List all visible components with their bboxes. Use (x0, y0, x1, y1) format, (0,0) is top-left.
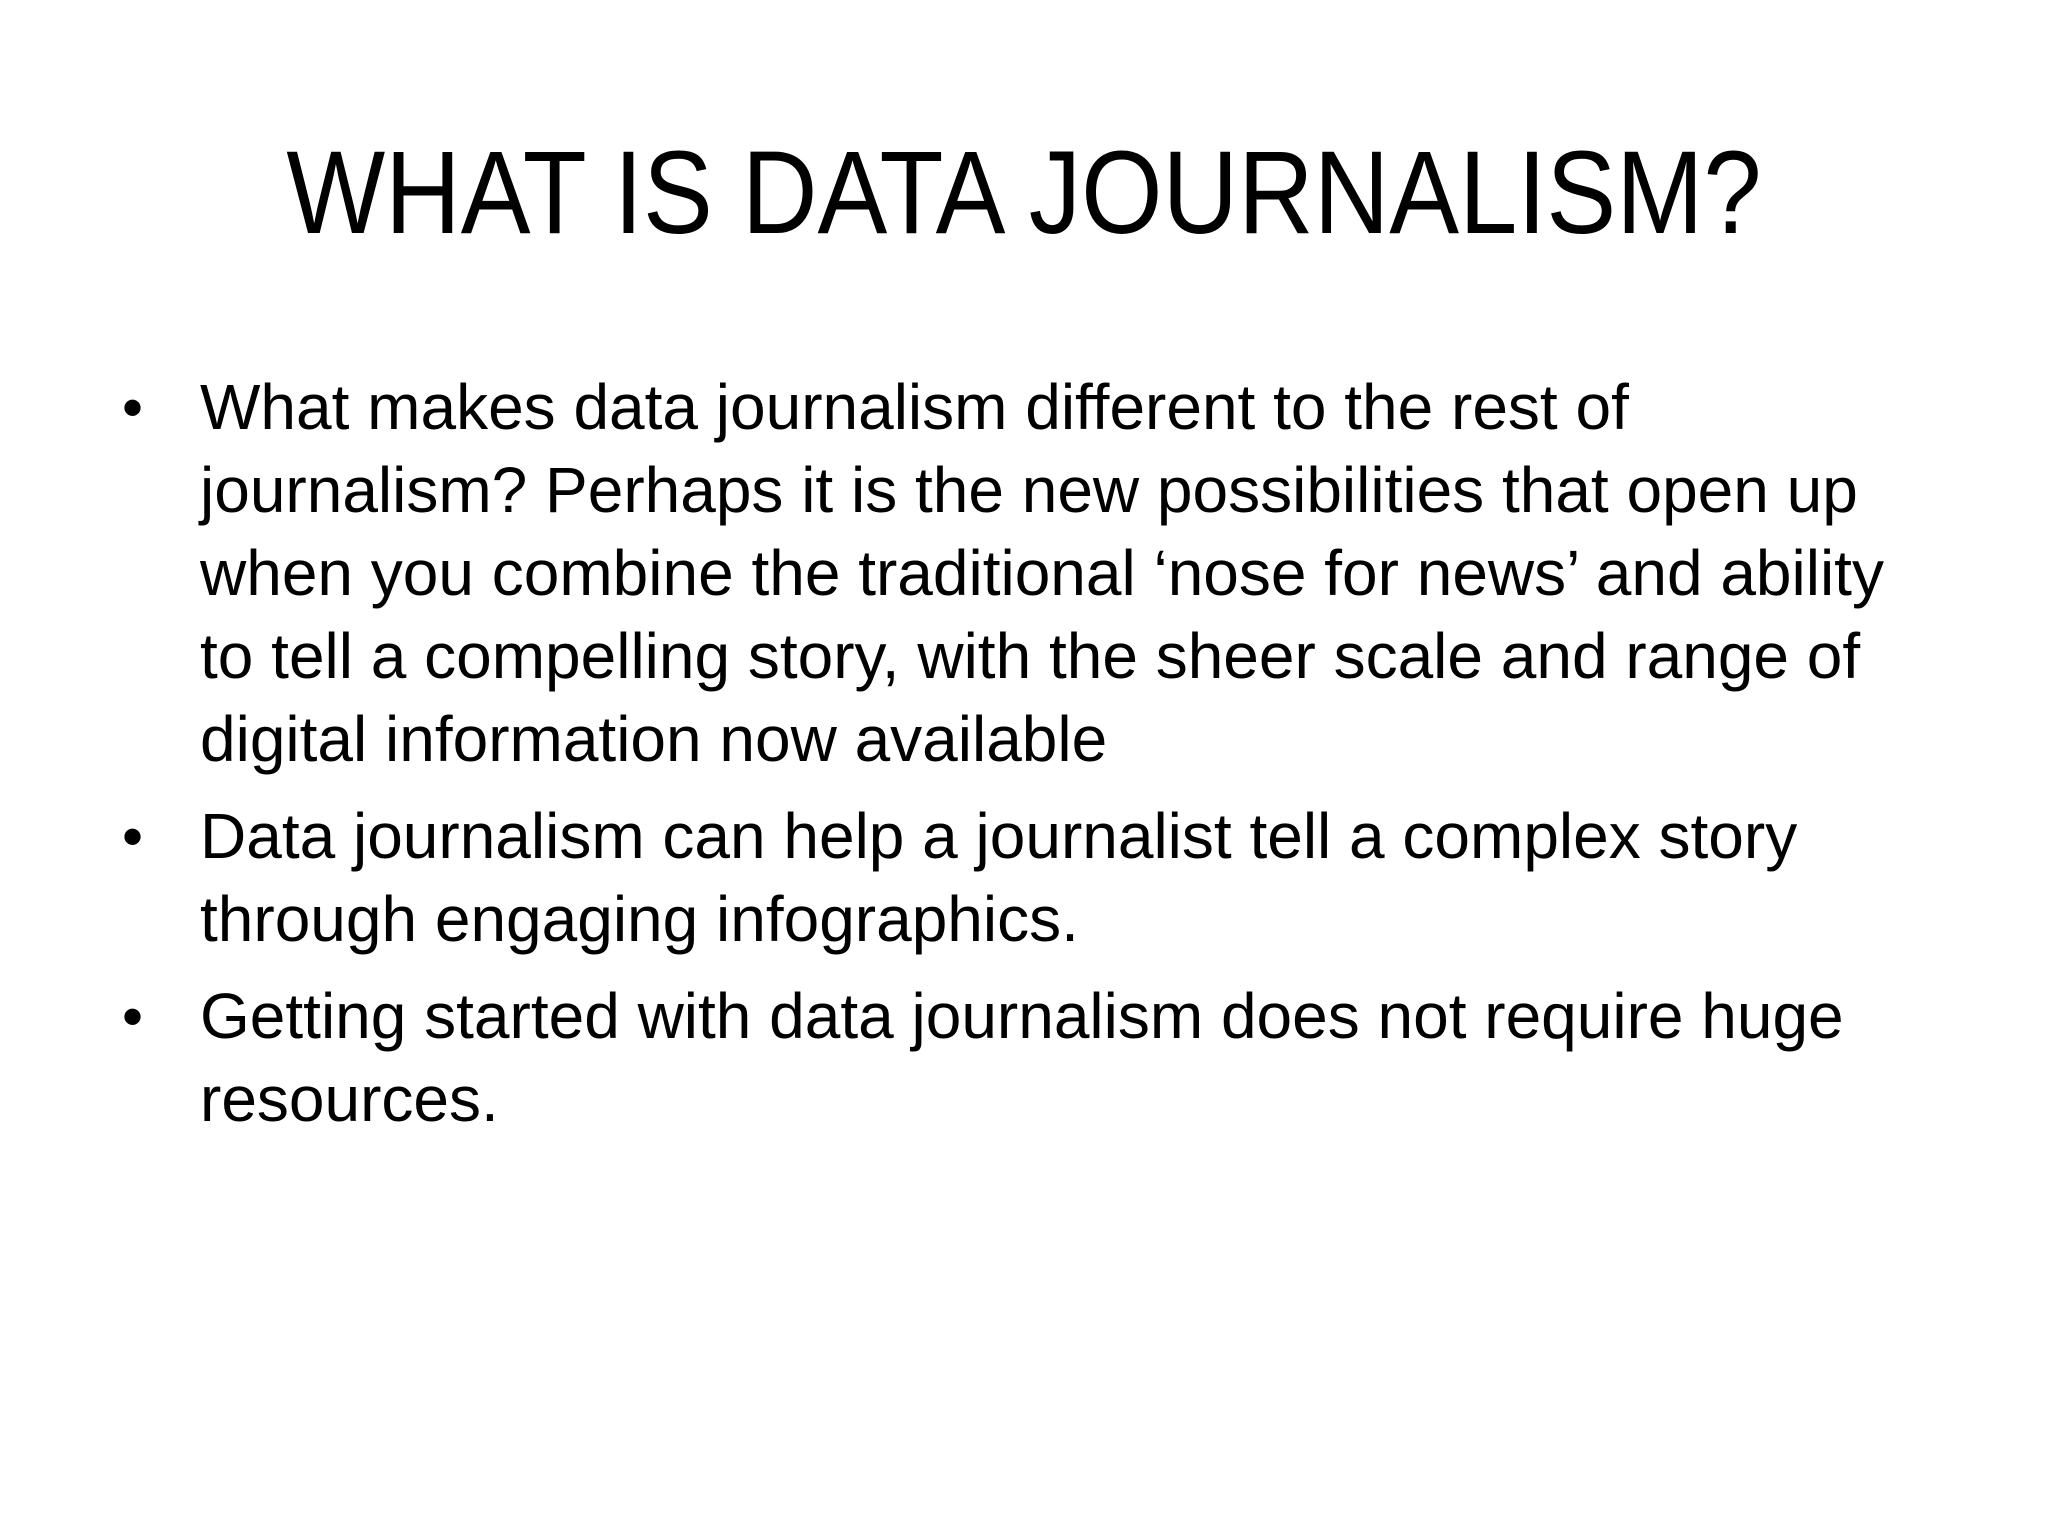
bullet 3 (122, 980, 1844, 1135)
bullet 3: resources. (200, 1063, 499, 1135)
bullet 2: Data journalism can help a journalist tell a complex story (200, 800, 1797, 872)
bullet 2: • (122, 803, 143, 870)
title: WHAT IS DATA JOURNALISM? (286, 127, 1762, 259)
bullet 2: through engaging infographics. (200, 883, 1079, 955)
bullet 3: Getting started with data journalism does not require huge (200, 980, 1844, 1052)
bullet 1: What makes data journalism different to the rest of (200, 371, 1629, 443)
bullet 1: when you combine the traditional ‘nose for news’ and ability (200, 537, 1884, 609)
bullet 1: to tell a compelling story, with the sheer scale and range of (200, 620, 1860, 692)
bullet 2 (122, 800, 1798, 955)
bullet 1: • (122, 374, 143, 441)
bullet 1: digital information now available (200, 703, 1107, 775)
bullet 3: • (122, 983, 143, 1050)
bullet 1 (122, 371, 1884, 775)
bullet 1: journalism? Perhaps it is the new possibilities that open up (200, 454, 1858, 526)
